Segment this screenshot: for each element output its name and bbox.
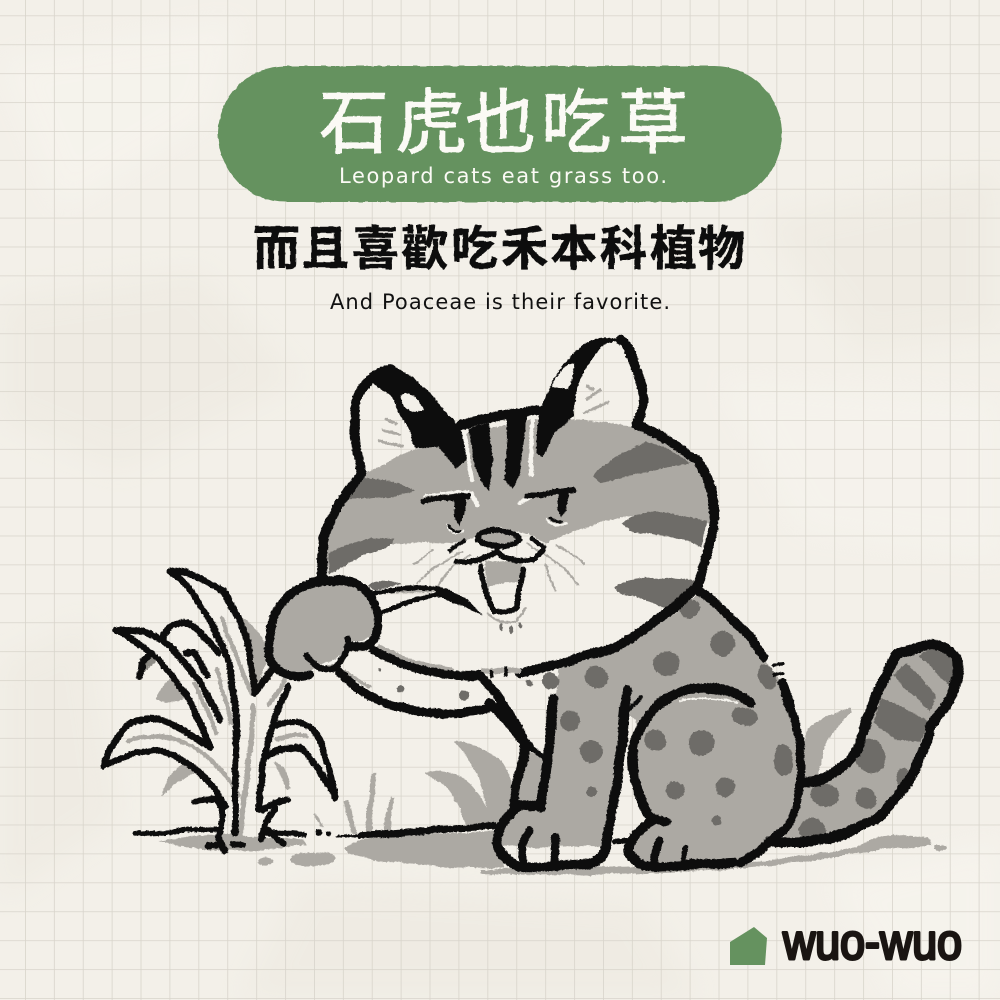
main title: 石虎也吃草 <box>319 84 688 162</box>
grass blade in mouth <box>373 589 437 593</box>
eyes and brows <box>423 490 573 531</box>
subtitle chinese: 而且喜歡吃禾本科植物 <box>253 222 745 275</box>
illustration: grass and ground <box>104 571 520 868</box>
logo <box>730 914 962 970</box>
chin marks <box>488 608 525 623</box>
title banner <box>218 66 782 202</box>
tail fill <box>783 646 958 839</box>
black grass outlines <box>104 571 493 852</box>
ground dots <box>315 829 330 835</box>
blade tips in grass <box>140 653 155 677</box>
grey background blades <box>156 618 520 833</box>
arm shading <box>380 647 453 669</box>
nose mouth muzzle <box>450 530 545 613</box>
subtitle english: And Poaceae is their favorite. <box>330 290 670 314</box>
cat head <box>322 338 714 677</box>
paw <box>268 580 380 677</box>
icon: green house <box>730 927 767 965</box>
face stripes <box>328 442 706 610</box>
body spots <box>525 598 793 826</box>
body outlines <box>490 592 958 867</box>
body fill <box>500 593 799 867</box>
white highlight above haunch <box>680 698 737 703</box>
ground shadows <box>158 832 503 868</box>
grey leaf veins <box>128 617 307 833</box>
wordmark: wuo-wuo <box>782 914 962 970</box>
english title: Leopard cats eat grass too. <box>339 164 667 188</box>
illustration: leopard cat <box>268 338 958 875</box>
mouth tongue <box>485 562 523 587</box>
ground shadow under cat <box>480 835 932 875</box>
head outline <box>322 340 714 673</box>
shadow blade behind tail <box>801 708 850 787</box>
cat body <box>480 592 958 875</box>
ears and forehead black markings <box>370 338 620 492</box>
tail stripes and spots <box>799 649 953 841</box>
green pill <box>218 66 782 202</box>
arm spots <box>378 669 532 700</box>
ear hatch marks <box>378 386 607 446</box>
forehead white streaks <box>423 422 567 532</box>
collar ticks on chest <box>482 668 522 674</box>
back leg fill <box>513 750 543 807</box>
face grey band <box>323 420 710 573</box>
arm outlines <box>338 650 523 737</box>
whiskers <box>413 543 584 593</box>
raised arm and paw holding grass <box>268 580 532 737</box>
